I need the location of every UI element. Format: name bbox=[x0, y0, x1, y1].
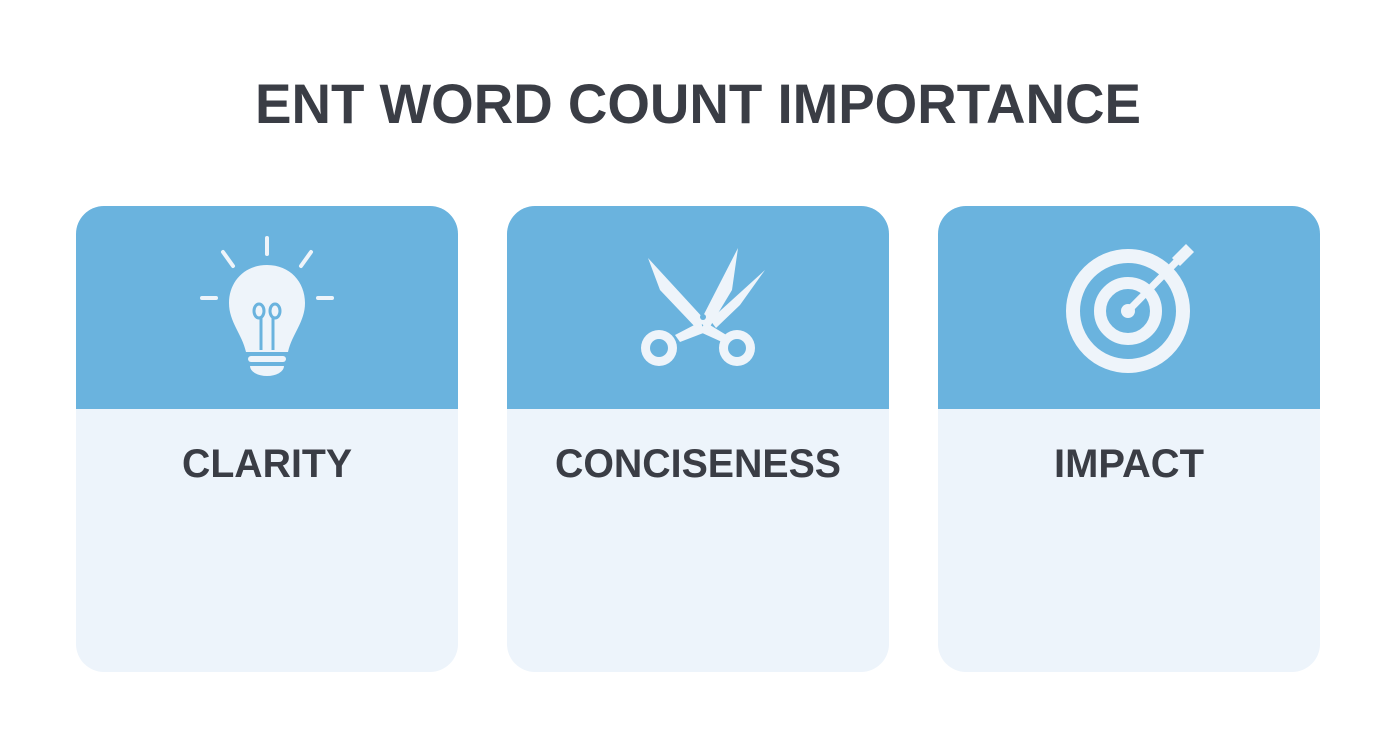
icon: scissors bbox=[641, 248, 765, 366]
panel: impact bbox=[938, 206, 1320, 672]
label: conciseness: CONCISENESS bbox=[555, 442, 841, 486]
label: clarity: CLARITY bbox=[182, 442, 352, 486]
icon: target bbox=[1073, 244, 1194, 366]
label: impact: IMPACT bbox=[1054, 442, 1204, 486]
panel: conciseness bbox=[507, 206, 889, 672]
title: ENT WORD COUNT IMPORTANCE bbox=[255, 72, 1141, 135]
panel: clarity bbox=[76, 206, 458, 672]
icon: light bulb bbox=[202, 238, 332, 376]
